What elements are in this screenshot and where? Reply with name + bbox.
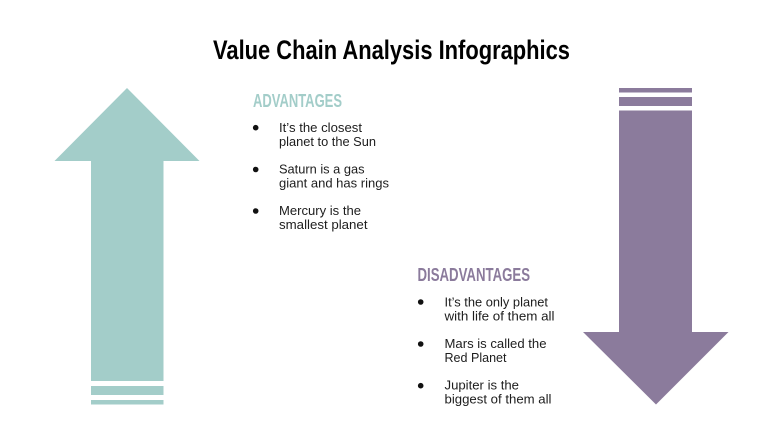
list item: closest planet: It’s the closest bbox=[279, 121, 363, 135]
panel: disadvantages bbox=[418, 265, 554, 406]
heading: disadvantages: DISADVANTAGES bbox=[418, 265, 530, 285]
list: advantages bbox=[253, 121, 389, 232]
list item: red planet: Mars is called the bbox=[444, 337, 546, 351]
list item: life: It’s the only planet bbox=[444, 296, 548, 310]
arrow: disadvantages, pointing down bbox=[583, 88, 728, 404]
list item: red planet: Red Planet bbox=[444, 351, 507, 365]
list item: biggest planet: biggest of them all bbox=[444, 392, 552, 406]
list item: closest planet bbox=[253, 121, 376, 149]
list item: red planet bbox=[418, 337, 546, 365]
list item: gas giant: Saturn is a gas bbox=[279, 162, 364, 176]
list item: biggest planet: Jupiter is the bbox=[444, 378, 519, 392]
list item: smallest planet bbox=[253, 204, 368, 232]
heading: advantages: ADVANTAGES bbox=[253, 91, 342, 111]
list item: smallest planet: smallest planet bbox=[279, 218, 368, 232]
list item: life bbox=[418, 296, 554, 324]
list item: gas giant: giant and has rings bbox=[279, 176, 389, 190]
list: disadvantages bbox=[418, 296, 554, 406]
list item: smallest planet: Mercury is the bbox=[279, 204, 361, 218]
title: Value Chain Analysis Infographics bbox=[213, 35, 570, 65]
list item: biggest planet bbox=[418, 378, 552, 406]
list item: gas giant bbox=[253, 162, 389, 190]
arrow: advantages, pointing up bbox=[54, 88, 200, 404]
list item: closest planet: planet to the Sun bbox=[279, 135, 376, 149]
panel: advantages bbox=[253, 91, 389, 232]
list item: life: with life of them all bbox=[443, 310, 554, 324]
